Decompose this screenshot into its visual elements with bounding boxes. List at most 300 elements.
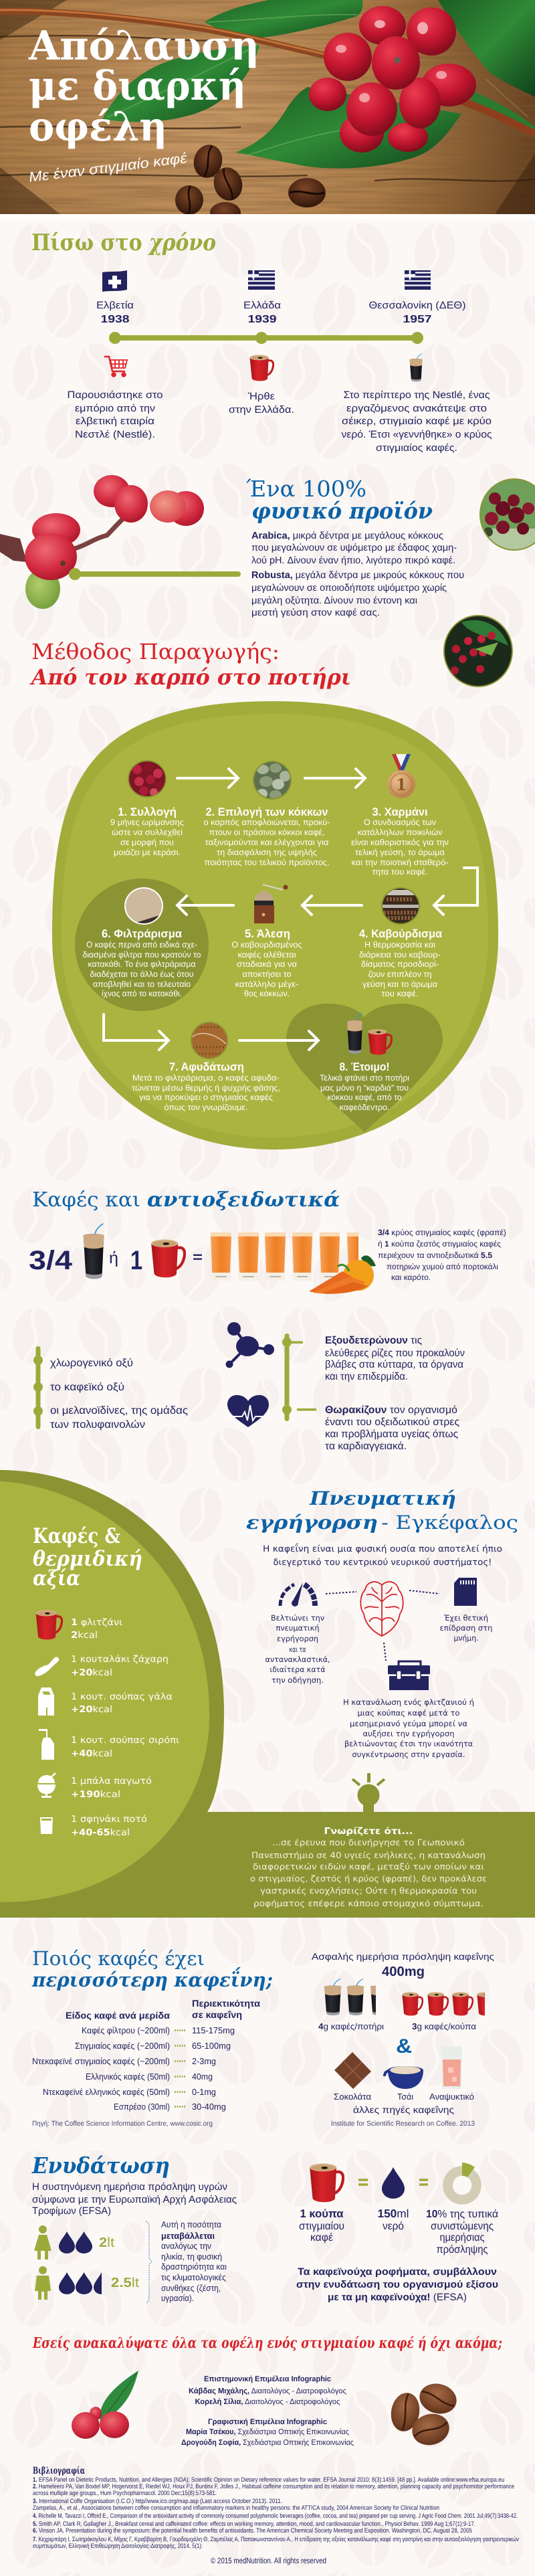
callout: did you know: ροφήματος επέφερε κάποιο στομαχικό σύμπτωμα. bbox=[253, 1898, 484, 1908]
calorie item: milk: 1 κουτ. σούπας γάλα bbox=[71, 1691, 173, 1702]
table: caffeine per serving: 2-3mg bbox=[192, 2056, 216, 2066]
calorie item: syrup bbox=[39, 1729, 179, 1760]
list: antioxidant compounds: το καφεϊκό οξύ bbox=[50, 1382, 124, 1393]
step 6 text: διασμένα φίλτρα που κρατούν το bbox=[83, 950, 201, 959]
text: alertness: πνευματική bbox=[276, 1623, 320, 1633]
step 8 text: μας μόνο η “καρδιά” του bbox=[320, 1083, 409, 1093]
step 1 text: 9 μήνες ωρίμανσης bbox=[110, 818, 184, 827]
table: caffeine per serving: 0-1mg bbox=[192, 2087, 216, 2097]
step 5 text: καφές αλέθεται bbox=[238, 950, 296, 959]
step 3 text bbox=[351, 806, 449, 877]
text: alertness: και τα bbox=[289, 1645, 306, 1654]
credits: Επιστημονική Επιμέλεια Infographic bbox=[204, 2375, 332, 2383]
callout: did you know: διαφορετικών ειδών καφέ, μεταξύ των οποίων και bbox=[253, 1861, 484, 1871]
text: one cup bbox=[299, 2207, 344, 2243]
image: cherries with leaf bbox=[72, 2371, 138, 2439]
image: coffee beans bbox=[388, 2380, 460, 2449]
text: neutralise free radicals bbox=[325, 1335, 465, 1382]
bibliography: Zampelas, A., et al., Associations between coffee consumption and inflammatory markers in healthy persons: the ATTICA study, 2004 American Society for Clinical Nutrition bbox=[33, 2504, 439, 2512]
hero subtitle: Με έναν στιγμιαίο καφέ bbox=[28, 151, 189, 185]
step 6 text bbox=[83, 927, 201, 998]
text: ten percent of intake: συνιστώμενης bbox=[431, 2221, 494, 2232]
text: equivalence note bbox=[378, 1228, 506, 1282]
image: orange and carrots bbox=[309, 1255, 376, 1294]
table: caffeine per serving: 115-175mg bbox=[192, 2025, 235, 2035]
table: caffeine per serving: Ντεκαφεϊνέ ελληνικός καφές (50ml) bbox=[43, 2087, 170, 2097]
heading: natural product bbox=[246, 476, 433, 524]
step 5 text: αποκτήσει το bbox=[242, 970, 292, 979]
bibliography: across multiple age groups., Hum Psychopharmacol. 2000 Dec;15(8):573-581. bbox=[33, 2490, 217, 2497]
equation: coffee equals juice: 1 bbox=[130, 1246, 142, 1275]
arrow: step 6 to 7 bbox=[104, 1014, 169, 1050]
credits: Δρογούδη Σοφία, Σχεδιάστρια Οπτικής Επικοινωνίας bbox=[181, 2439, 354, 2447]
icon: greek flag bbox=[248, 270, 275, 290]
timeline text: 1939: Ήρθε bbox=[247, 391, 275, 402]
panel: calories and did you know band bbox=[0, 1470, 535, 1918]
icon: tea cup bbox=[385, 2066, 423, 2089]
equation: coffee equals juice: = bbox=[193, 1249, 203, 1265]
table: caffeine per serving: 40mg bbox=[192, 2072, 213, 2082]
hero title: Απόλαυση bbox=[28, 23, 259, 70]
step 1 text: σε μορφή που bbox=[120, 838, 174, 847]
step 1 text: ώστε να συλλεχθεί bbox=[112, 828, 183, 837]
panel: production process bbox=[52, 701, 498, 1149]
section: antioxidants bbox=[29, 1188, 506, 1452]
step 3 text: είναι καθοριστικός για την bbox=[351, 838, 449, 847]
step 2 text: 2. Επιλογή των κόκκων bbox=[206, 806, 328, 818]
dotted link bbox=[409, 1590, 439, 1594]
equals bbox=[419, 2180, 428, 2185]
text: equivalence note: περιέχουν τα αντιοξειδωτικά 5.5 bbox=[378, 1251, 492, 1260]
timeline text: 1957: εργαζόμενος ανακάτεψε στο bbox=[346, 403, 487, 414]
icon: iced coffee glass bbox=[410, 353, 422, 381]
text: other caffeine sources bbox=[334, 2092, 474, 2115]
hero title bbox=[28, 23, 259, 151]
icon: heart with pulse bbox=[227, 1395, 269, 1427]
text: arabica and robusta: λού pH. Δίνουν έναν ήπιο, λιγότερο πικρό καφέ. bbox=[251, 555, 455, 566]
timeline labels: Ελλάδα bbox=[243, 300, 281, 311]
icon: swiss flag bbox=[102, 270, 127, 292]
text: protect the body: έναντι του οξειδωτικού στρες bbox=[325, 1416, 459, 1428]
timeline labels: 1939 bbox=[247, 314, 277, 325]
icon: medal bbox=[387, 754, 415, 798]
text: intake varies: Αυτή η ποσότητα bbox=[161, 2219, 221, 2229]
step 5 text: Ο καβουρδισμένος bbox=[231, 940, 302, 949]
step 7 text: 7. Αφυδάτωση bbox=[169, 1061, 244, 1073]
table: caffeine per serving: Ντεκαφεϊνέ στιγμιαίος καφές (~200ml) bbox=[32, 2056, 170, 2066]
text: recommended intake: Τροφίμων (EFSA) bbox=[32, 2205, 111, 2217]
timeline labels: 1957 bbox=[403, 314, 432, 325]
heading: which coffee has more caffeine: περισσότερη καφεΐνη; bbox=[31, 1967, 273, 1991]
icon: light bulb bbox=[352, 1773, 385, 1812]
icon: shopping cart bbox=[104, 357, 127, 376]
calorie item: milk: +20kcal bbox=[71, 1704, 112, 1715]
section: timeline bbox=[31, 229, 492, 454]
text: memory: επίδραση στη bbox=[440, 1623, 492, 1633]
timeline text: 1957: νερό. Έτσι «γεννήθηκε» ο κρύος bbox=[341, 429, 492, 440]
step 8 text: Τελικά φτάνει στο ποτήρι bbox=[320, 1073, 409, 1083]
credits: Κάβδας Μιχάλης, Διαιτολόγος - Διατροφολόγος bbox=[189, 2387, 346, 2395]
step 2 text: τη διασφάλιση της υψηλής bbox=[217, 848, 317, 857]
text: protect the body: και προβλήματα υγείας όπως bbox=[325, 1429, 458, 1440]
text: intake varies: μεταβάλλεται bbox=[161, 2231, 215, 2241]
text: work concentration: συγκέντρωσης στην εργασία. bbox=[352, 1750, 465, 1759]
equation: coffee equals juice: ή bbox=[109, 1249, 118, 1267]
icon: man bbox=[35, 2266, 51, 2300]
timeline text: 1939 bbox=[229, 391, 294, 416]
text: intro: Η καφεΐνη είναι μια φυσική ουσία που αποτελεί ήπιο bbox=[263, 1543, 502, 1554]
text: intake varies bbox=[161, 2219, 227, 2303]
label: 2.5 litres: 2.5lt bbox=[111, 2276, 139, 2290]
bibliography: Βιβλιογραφία bbox=[33, 2466, 85, 2476]
calorie item: sugar spoon: +20kcal bbox=[71, 1667, 112, 1678]
table: caffeine per serving: Ελληνικός καφές (50ml) bbox=[86, 2072, 170, 2082]
step 7 text: Μετά το φιλτράρισμα, ο καφές αφυδα- bbox=[132, 1073, 280, 1083]
text: intake varies: ηλικία, τη φυσική bbox=[161, 2251, 222, 2262]
text: ten percent of intake: 10% της τυπικά bbox=[426, 2209, 498, 2220]
step 8 text: καφεόδεντρο. bbox=[340, 1103, 389, 1112]
photo: ripe arabica cherries bbox=[479, 478, 535, 552]
arrow: step 3 to 4 bbox=[434, 868, 477, 915]
credits: Γραφιστική Επιμέλεια Infographic bbox=[208, 2418, 328, 2426]
text: arabica and robusta bbox=[251, 531, 464, 618]
calorie item: cup: 2kcal bbox=[71, 1630, 98, 1641]
icon: water drops 2 litres bbox=[59, 2231, 92, 2253]
section: natural product bbox=[0, 475, 535, 687]
text: serving labels: 3g καφές/κούπα bbox=[412, 2021, 476, 2031]
credits bbox=[181, 2375, 354, 2447]
diagram: benefit connector bbox=[282, 1333, 316, 1421]
step 5 text: θος κόκκων. bbox=[244, 989, 290, 998]
heading: mental alertness: - Εγκέφαλος bbox=[381, 1511, 518, 1534]
callout: did you know: Πανεπιστήμιο σε 40 υγιείς ενήλικες, η κατανάλωση bbox=[251, 1850, 486, 1860]
calorie item: ice cream: 1 μπάλα παγωτό bbox=[71, 1776, 152, 1786]
text: one cup: στιγμιαίου bbox=[299, 2221, 344, 2232]
text: neutralise free radicals: Εξουδετερώνουν τις bbox=[325, 1335, 422, 1346]
dotted link bbox=[326, 1592, 356, 1594]
bibliography: συμπτωμάτων, Ελληνική Επιθεώρηση Διαιτολογίας-Διατροφής, 2014, 5(1): bbox=[33, 2543, 203, 2550]
heading: mental alertness bbox=[246, 1487, 518, 1534]
step 6 text: διαδέχεται το άλλο έως ότου bbox=[90, 970, 194, 979]
text: alertness: ιδιαίτερα κατά bbox=[270, 1665, 326, 1674]
source note: Institute for Scientific Research on Coffee. 2013 bbox=[331, 2120, 475, 2128]
step 2 text: πτουν οι πράσινοι κόκκοι καφέ, bbox=[209, 828, 325, 837]
callout: did you know bbox=[250, 1826, 487, 1908]
text: work concentration: Η κατανάλωση ενός φλιτζανιού ή bbox=[343, 1697, 474, 1707]
calorie item: syrup: +40kcal bbox=[71, 1748, 112, 1759]
text: caffeinated drinks hydrate: με τα μη καφεϊνούχα! (EFSA) bbox=[328, 2292, 467, 2303]
calorie item: cup: 1 φλιτζάνι bbox=[71, 1617, 122, 1628]
arrow bbox=[177, 896, 233, 915]
timeline text: 1957: σέικερ, στιγμιαίο καφέ με κρύο bbox=[342, 416, 492, 427]
calorie item: shot glass bbox=[40, 1814, 147, 1838]
label: 2 litres: 2lt bbox=[99, 2235, 114, 2250]
icon: water drop bbox=[382, 2167, 405, 2199]
icon: greek flag bbox=[405, 270, 431, 290]
step 3 text: Ο συνδυασμός των bbox=[364, 818, 436, 827]
timeline text: 1938 bbox=[67, 389, 163, 440]
list: antioxidant compounds: οι μελανοϊδίνες, της ομάδας bbox=[50, 1405, 188, 1416]
icon: red mug bbox=[250, 355, 274, 381]
text: protect the body bbox=[325, 1404, 459, 1452]
text: alertness: αντανακλαστικά, bbox=[265, 1655, 330, 1664]
text: arabica and robusta: που μεγαλώνουν σε υψόμετρο με έδαφος χαμη- bbox=[251, 543, 457, 553]
calorie item: ice cream bbox=[37, 1773, 152, 1800]
icon: coffee grinder bbox=[254, 885, 288, 923]
icon: water drops 2.5 litres bbox=[59, 2272, 102, 2294]
connector line bbox=[69, 568, 241, 580]
heading: mental alertness: εγρήγορση bbox=[246, 1511, 378, 1534]
timeline labels: Θεσσαλονίκη (ΔΕΘ) bbox=[369, 300, 465, 311]
step 2 text: ποιότητας του τελικού προϊόντος. bbox=[205, 858, 329, 867]
text: caffeinated drinks hydrate: στην ενυδάτωση του οργανισμού εξίσου bbox=[296, 2279, 498, 2290]
step 2 text: ο καρπός αποφλοιώνεται, προκύ- bbox=[203, 818, 330, 827]
icon: soda glass bbox=[441, 2046, 462, 2089]
table: caffeine per serving: σε καφεΐνη bbox=[192, 2009, 242, 2020]
text: neutralise free radicals: βλάβες στα κύτταρα, τα όργανα bbox=[325, 1359, 463, 1370]
text: intake varies: αναλόγως την bbox=[161, 2241, 211, 2251]
step 5 text: 5. Άλεση bbox=[245, 927, 290, 940]
step 8 text bbox=[320, 1061, 409, 1112]
step 6 backdrop bbox=[75, 879, 209, 1011]
text: intake varies: υγρασία). bbox=[161, 2293, 194, 2303]
table: caffeine per serving: Εσπρέσο (30ml) bbox=[114, 2102, 170, 2112]
table: caffeine per serving: Περιεκτικότητα bbox=[192, 1998, 260, 2009]
icon: mug bbox=[310, 2164, 343, 2202]
text: work concentration: αυξήσει την εγρήγορση bbox=[362, 1729, 455, 1738]
list: antioxidant compounds: των πολυφαινολών bbox=[50, 1419, 145, 1431]
timeline text: 1939: στην Ελλάδα. bbox=[229, 404, 294, 416]
step 4 text: γεύση και το άρωμα bbox=[362, 980, 437, 989]
list: antioxidant compounds: χλωρογενικό οξύ bbox=[50, 1358, 133, 1369]
text: arabica and robusta: Robusta, μεγάλα δέντρα με μικρούς κόκκους που bbox=[251, 570, 464, 581]
step 3 text: και την ποιοτική σταθερό- bbox=[352, 858, 448, 867]
text: serving labels bbox=[318, 2021, 476, 2031]
step 6 text: ίχνος από το κατακάθι. bbox=[102, 989, 182, 998]
arrow bbox=[305, 769, 365, 788]
brace bbox=[146, 2221, 152, 2303]
credits: Κορελή Σίλια, Διαιτολόγος - Διατροφολόγος bbox=[195, 2398, 340, 2406]
text: intro: διεγερτικό του κεντρικού νευρικού συστήματος! bbox=[273, 1558, 492, 1568]
step 4 text: ζουν επιπλέον τη bbox=[368, 970, 432, 979]
equation: coffee equals juice bbox=[29, 1224, 203, 1279]
heading: mental alertness: Πνευματική bbox=[309, 1487, 456, 1509]
heading: production method bbox=[29, 639, 351, 690]
icon: gauge bbox=[280, 1582, 315, 1606]
heading: calories: θερμιδική bbox=[33, 1547, 142, 1571]
photo: dried coffee bbox=[191, 1022, 228, 1059]
timeline text: 1957: στιγμιαίος καφές. bbox=[376, 442, 457, 454]
photo: harvested cherries bbox=[127, 759, 167, 800]
timeline labels bbox=[96, 300, 465, 325]
timeline line bbox=[109, 332, 423, 344]
list: antioxidant compounds bbox=[33, 1346, 188, 1431]
text: 150 ml water bbox=[377, 2207, 409, 2232]
photo: robusta cherries bbox=[443, 615, 514, 687]
text: safe daily intake: 400mg bbox=[382, 1964, 425, 1979]
text: arabica and robusta: μεγάλη οξύτητα. Δίνουν πιο έντονη και bbox=[251, 595, 417, 606]
step 1 text bbox=[110, 806, 184, 857]
arrow bbox=[239, 1031, 318, 1050]
icon: brain bbox=[360, 1582, 403, 1636]
calorie item: syrup: 1 κουτ. σούπας σιρόπι bbox=[71, 1735, 179, 1746]
text: recommended intake bbox=[32, 2181, 237, 2217]
step 3 text: τελική γεύση, το άρωμα bbox=[355, 848, 445, 857]
hero photo banner bbox=[0, 0, 535, 223]
text: other caffeine sources: Αναψυκτικό bbox=[429, 2092, 474, 2102]
text: memory: μνήμη. bbox=[453, 1633, 479, 1643]
step 1 text: μοιάζει με κεράσι. bbox=[114, 848, 181, 857]
bibliography: 3. International Coffe Organisation (I.C.O.) http//www.ico.org/map.asp (Last access October 2013). 2011. bbox=[33, 2498, 282, 2505]
text: recommended intake: Η συστηνόμενη ημερήσια πρόσληψη υγρών bbox=[32, 2181, 227, 2193]
step 6 text: αποβληθεί και το τελευταίο bbox=[93, 980, 191, 989]
text: intake varies: δραστηριότητα και bbox=[161, 2262, 227, 2272]
equation: coffee equals juice: 3/4 bbox=[29, 1246, 73, 1275]
icon: woman bbox=[34, 2225, 51, 2260]
text: intake varies: τις κλιματολογικές bbox=[161, 2272, 226, 2282]
text: protect the body: τα καρδιαγγειακά. bbox=[325, 1441, 407, 1452]
text: equivalence note: ή 1 κούπα ζεστός στιγμιαίος καφές bbox=[378, 1239, 501, 1249]
step 8 text: 8. Έτοιμο! bbox=[340, 1061, 389, 1073]
calorie item: cup bbox=[36, 1610, 122, 1641]
timeline text: 1938: Παρουσιάστηκε στο bbox=[67, 389, 163, 401]
calorie item: sugar spoon bbox=[35, 1654, 169, 1678]
heading: coffee and antioxidants: Καφές και αντιοξειδωτικά bbox=[32, 1188, 340, 1212]
image: orange juice glasses bbox=[210, 1232, 368, 1281]
step 7 text: για να προκύψει ο στιγμιαίος καφές bbox=[139, 1093, 273, 1102]
text: intake varies: συνθήκες (ζέστη, bbox=[161, 2283, 221, 2293]
icon: ready drinks bbox=[347, 1013, 392, 1054]
step 8 heart backdrop bbox=[286, 1004, 443, 1132]
text: memory bbox=[440, 1613, 492, 1643]
heading: natural product: φυσικό προϊόν bbox=[251, 498, 433, 524]
text: other caffeine sources: Τσάι bbox=[397, 2092, 413, 2102]
calorie item: shot glass: 1 σφηνάκι ποτό bbox=[71, 1814, 147, 1825]
icon: briefcase bbox=[388, 1661, 430, 1690]
table: caffeine per serving bbox=[32, 1998, 260, 2112]
section: mental alertness bbox=[246, 1487, 518, 1812]
heading: back in time: Πίσω στο χρόνο bbox=[31, 229, 216, 256]
step 5 text: σταδιακά για να bbox=[237, 959, 297, 969]
text: alertness: την οδήγηση. bbox=[272, 1675, 324, 1685]
table: caffeine per serving: Στιγμιαίος καφές (~200ml) bbox=[75, 2041, 170, 2051]
heading: calories: Καφές & bbox=[33, 1524, 120, 1548]
arrow bbox=[177, 769, 238, 788]
hero title: με διαρκή bbox=[29, 63, 246, 110]
timeline text: 1957 bbox=[341, 389, 492, 454]
text: work concentration: μεσημεριανό γεύμα μπορεί να bbox=[350, 1719, 467, 1728]
step 4 text: Η θερμοκρασία και bbox=[364, 940, 435, 949]
text: 150 ml water: 150ml bbox=[377, 2207, 409, 2220]
heading: calories bbox=[33, 1524, 142, 1590]
heading: which coffee has more caffeine bbox=[31, 1947, 273, 1991]
icon: molecule bbox=[226, 1322, 274, 1368]
text: other caffeine sources: Σοκολάτα bbox=[334, 2092, 371, 2102]
step 4 text: 4. Καβούρδισμα bbox=[359, 927, 443, 940]
table: caffeine per serving: Καφές φίλτρου (~200ml) bbox=[82, 2025, 170, 2035]
text: ten percent of intake bbox=[426, 2209, 498, 2256]
text: one cup: 1 κούπα bbox=[300, 2207, 344, 2220]
step 5 text: κατάλληλο μέγε- bbox=[235, 980, 298, 989]
step 4 text bbox=[359, 927, 443, 998]
text: work concentration bbox=[343, 1697, 474, 1759]
photo: green beans bbox=[253, 761, 294, 802]
timeline text: 1938: εμπόριο από την bbox=[75, 403, 155, 414]
step 4 text: δίσματος προσδιορί- bbox=[361, 959, 439, 969]
timeline labels: 1938 bbox=[100, 314, 130, 325]
text: arabica and robusta: μεγαλώνουν σε οποιοδήποτε υψόμετρο χωρίς bbox=[251, 583, 447, 593]
heading: which coffee has more caffeine: Ποιός καφές έχει bbox=[32, 1947, 205, 1970]
timeline text: 1938: ελβετική εταιρία bbox=[76, 416, 154, 427]
text: ten percent of intake: πρόσληψης bbox=[436, 2244, 488, 2256]
text: arabica and robusta: Arabica, μικρά δέντρα με μεγάλους κόκκους bbox=[251, 531, 443, 541]
heading: hydration: Ενυδάτωση bbox=[31, 2152, 170, 2179]
text: alertness bbox=[265, 1613, 330, 1685]
text: memory: Έχει θετική bbox=[443, 1613, 488, 1623]
text: alertness: Βελτιώνει την bbox=[271, 1613, 324, 1623]
text: neutralise free radicals: και την επιδερμίδα. bbox=[325, 1371, 408, 1382]
step 7 text: όπως τον γνωρίζουμε. bbox=[165, 1103, 247, 1112]
step 4 text: του καφέ. bbox=[381, 989, 419, 998]
step 8 text: κόκκου καφέ, από το bbox=[328, 1093, 402, 1102]
calorie item: sugar spoon: 1 κουταλάκι ζάχαρη bbox=[71, 1654, 169, 1665]
callout: did you know: ο στιγμιαίος, ζεστός ή κρύος (φραπέ), δεν προκάλεσε bbox=[250, 1873, 487, 1883]
text: 150 ml water: νερό bbox=[383, 2221, 404, 2232]
table: caffeine per serving: 65-100mg bbox=[192, 2041, 231, 2051]
chart: ten percent donut bbox=[448, 2163, 476, 2200]
timeline labels: Ελβετία bbox=[96, 300, 134, 311]
text: equivalence note: 3/4 κρύος στιγμιαίος καφές (φραπέ) bbox=[378, 1228, 506, 1237]
icon: chocolate bbox=[334, 2052, 371, 2089]
table: caffeine per serving: Είδος καφέ ανά μερίδα bbox=[66, 2010, 170, 2021]
icon: medal: 1 bbox=[396, 775, 407, 794]
timeline text: 1957: Στο περίπτερο της Nestlé, ένας bbox=[344, 389, 490, 401]
text: neutralise free radicals: ελεύθερες ρίζες που προκαλούν bbox=[325, 1348, 465, 1359]
callout: did you know: Γνωρίζετε ότι... bbox=[324, 1826, 413, 1837]
equals bbox=[358, 2180, 368, 2185]
step 2 text bbox=[203, 806, 330, 867]
text: serving labels: 4g καφές/ποτήρι bbox=[318, 2021, 384, 2031]
calorie item: shot glass: +40-65 kcal bbox=[71, 1827, 130, 1838]
text: equivalence note: και καρότο. bbox=[391, 1273, 431, 1282]
text: other caffeine sources: άλλες πηγές καφεΐνης bbox=[353, 2104, 454, 2115]
text: equivalence note: ποτηριών χυμού από πορτοκάλι bbox=[387, 1262, 498, 1271]
text: intro bbox=[263, 1543, 502, 1568]
text: work concentration: μιας κούπας καφέ μετά το bbox=[357, 1708, 460, 1718]
source note: Πηγή: The Coffee Science Information Centre, www.cosic.org bbox=[32, 2120, 213, 2128]
step 6 text: κατακάθι. Το ένα φιλτράρισμα bbox=[88, 959, 195, 969]
bibliography bbox=[33, 2466, 519, 2550]
step 1 text: 1. Συλλογή bbox=[118, 806, 177, 818]
step 6 text: Ο καφές περνά από ειδικά σχε- bbox=[86, 940, 197, 949]
text: alertness: εγρήγορση bbox=[277, 1634, 318, 1643]
heading: production method: Μέθοδος Παραγωγής: bbox=[31, 639, 280, 664]
text: protect the body: Θωρακίζουν τον οργανισμό bbox=[325, 1404, 457, 1416]
step 7 text: τώνεται μέσω θερμής ή ψυχρής φάσης, bbox=[132, 1083, 280, 1093]
step 3 text: 3. Χαρμάνι bbox=[372, 806, 428, 818]
heading: natural product: Ένα 100% bbox=[246, 476, 366, 502]
callout: did you know: ...σε έρευνα που διενήργησε το Γεωπονικό bbox=[272, 1837, 465, 1847]
section: caffeine content bbox=[31, 1947, 498, 2128]
icon: memory card bbox=[454, 1578, 477, 1606]
step 6 text: 6. Φιλτράρισμα bbox=[102, 927, 183, 940]
credits: Μαρία Τσέκου, Σχεδιάστρια Οπτικής Επικοινωνίας bbox=[186, 2428, 349, 2436]
arrow bbox=[302, 896, 362, 915]
timeline text: 1938: Νεστλέ (Nestlé). bbox=[75, 429, 155, 440]
heading: production method: Από τον καρπό στο ποτήρι bbox=[29, 664, 351, 690]
text: work concentration: βελτιώνοντας έτσι την ικανότητα bbox=[344, 1739, 473, 1748]
callout: did you know: γαστρικές ενοχλήσεις; Ούτε η θερμοκρασία του bbox=[260, 1885, 477, 1896]
